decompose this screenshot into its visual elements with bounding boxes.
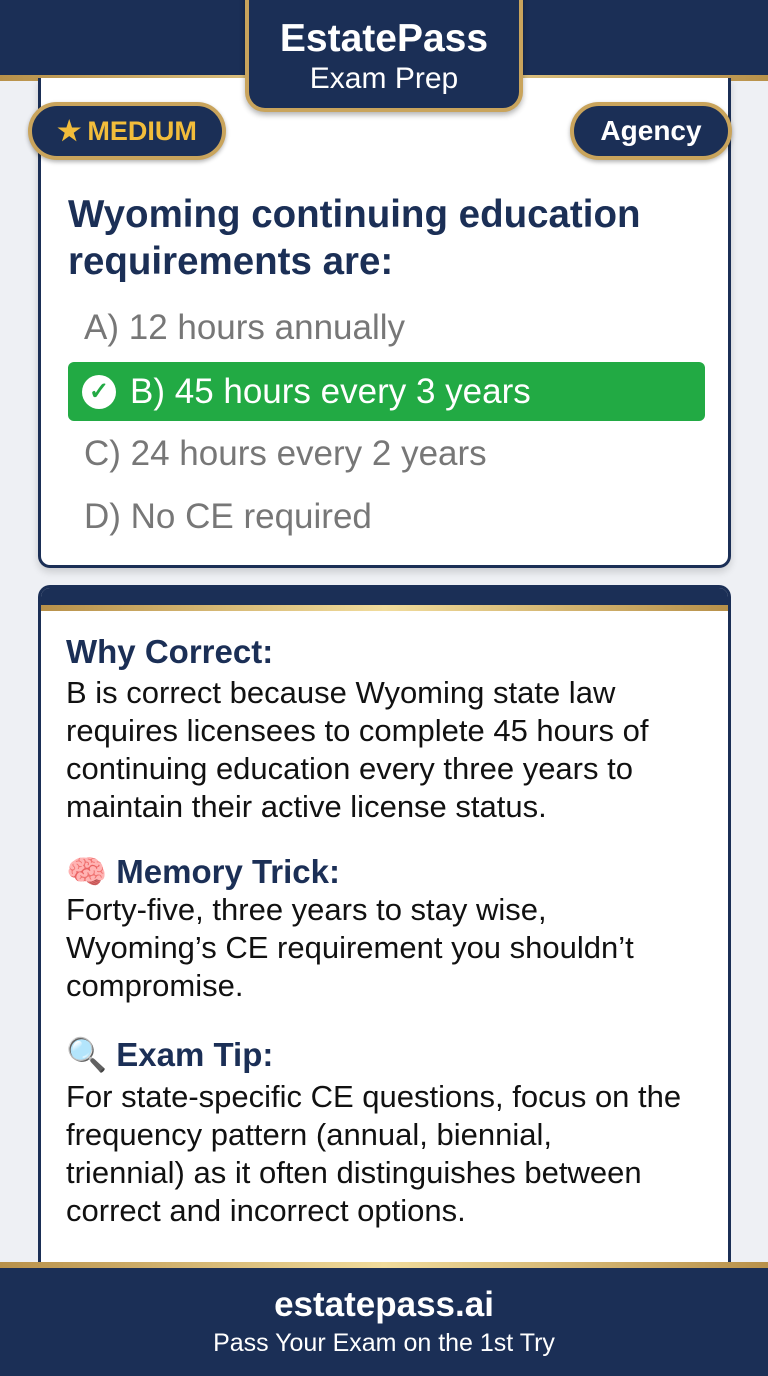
question heading: requirements are: bbox=[68, 240, 393, 283]
exam tip text: For state-specific CE questions, focus on the bbox=[66, 1079, 681, 1114]
why correct text: B is correct because Wyoming state law bbox=[66, 675, 615, 710]
exam tip text: correct and incorrect options. bbox=[66, 1193, 466, 1228]
exam tip heading: 🔍 Exam Tip: bbox=[66, 1036, 273, 1073]
option C: C) 24 hours every 2 years bbox=[84, 434, 487, 473]
badge: medium bbox=[28, 102, 226, 160]
memory trick text: Forty-five, three years to stay wise, bbox=[66, 892, 547, 927]
question heading bbox=[68, 193, 640, 283]
option A: A) 12 hours annually bbox=[84, 308, 405, 347]
memory trick text: compromise. bbox=[66, 968, 243, 1003]
title tab: Exam Prep bbox=[310, 62, 458, 95]
option D: D) No CE required bbox=[84, 497, 372, 536]
memory trick heading: 🧠 Memory Trick: bbox=[66, 853, 340, 890]
exam tip text: triennial) as it often distinguishes between bbox=[66, 1155, 642, 1190]
header band bbox=[0, 0, 768, 75]
question card bbox=[38, 78, 731, 568]
option B correct: B) 45 hours every 3 years bbox=[130, 372, 531, 410]
option B correct: ✓ bbox=[89, 378, 109, 405]
explanation card bbox=[38, 585, 731, 1275]
memory trick text bbox=[66, 892, 634, 1003]
why correct text: maintain their active license status. bbox=[66, 789, 547, 824]
option B correct bbox=[68, 362, 705, 421]
title tab bbox=[245, 0, 523, 112]
exam tip text: frequency pattern (annual, biennial, bbox=[66, 1117, 552, 1152]
badge: agency bbox=[570, 102, 732, 160]
badge: medium: ★ bbox=[57, 116, 81, 146]
why correct text: continuing education every three years to bbox=[66, 751, 633, 786]
why correct text bbox=[66, 675, 649, 824]
title tab: EstatePass bbox=[280, 17, 488, 60]
why correct text: requires licensees to complete 45 hours of bbox=[66, 713, 648, 748]
footer: estatepass.ai bbox=[274, 1285, 494, 1324]
question heading: Wyoming continuing education bbox=[68, 193, 640, 236]
badge: agency: Agency bbox=[600, 115, 702, 146]
why correct heading: Why Correct: bbox=[66, 633, 273, 670]
memory trick text: Wyoming’s CE requirement you shouldn’t bbox=[66, 930, 634, 965]
exam tip text bbox=[66, 1079, 681, 1228]
footer: Pass Your Exam on the 1st Try bbox=[213, 1329, 555, 1357]
footer bbox=[0, 1262, 768, 1376]
badge: medium: MEDIUM bbox=[87, 116, 197, 146]
